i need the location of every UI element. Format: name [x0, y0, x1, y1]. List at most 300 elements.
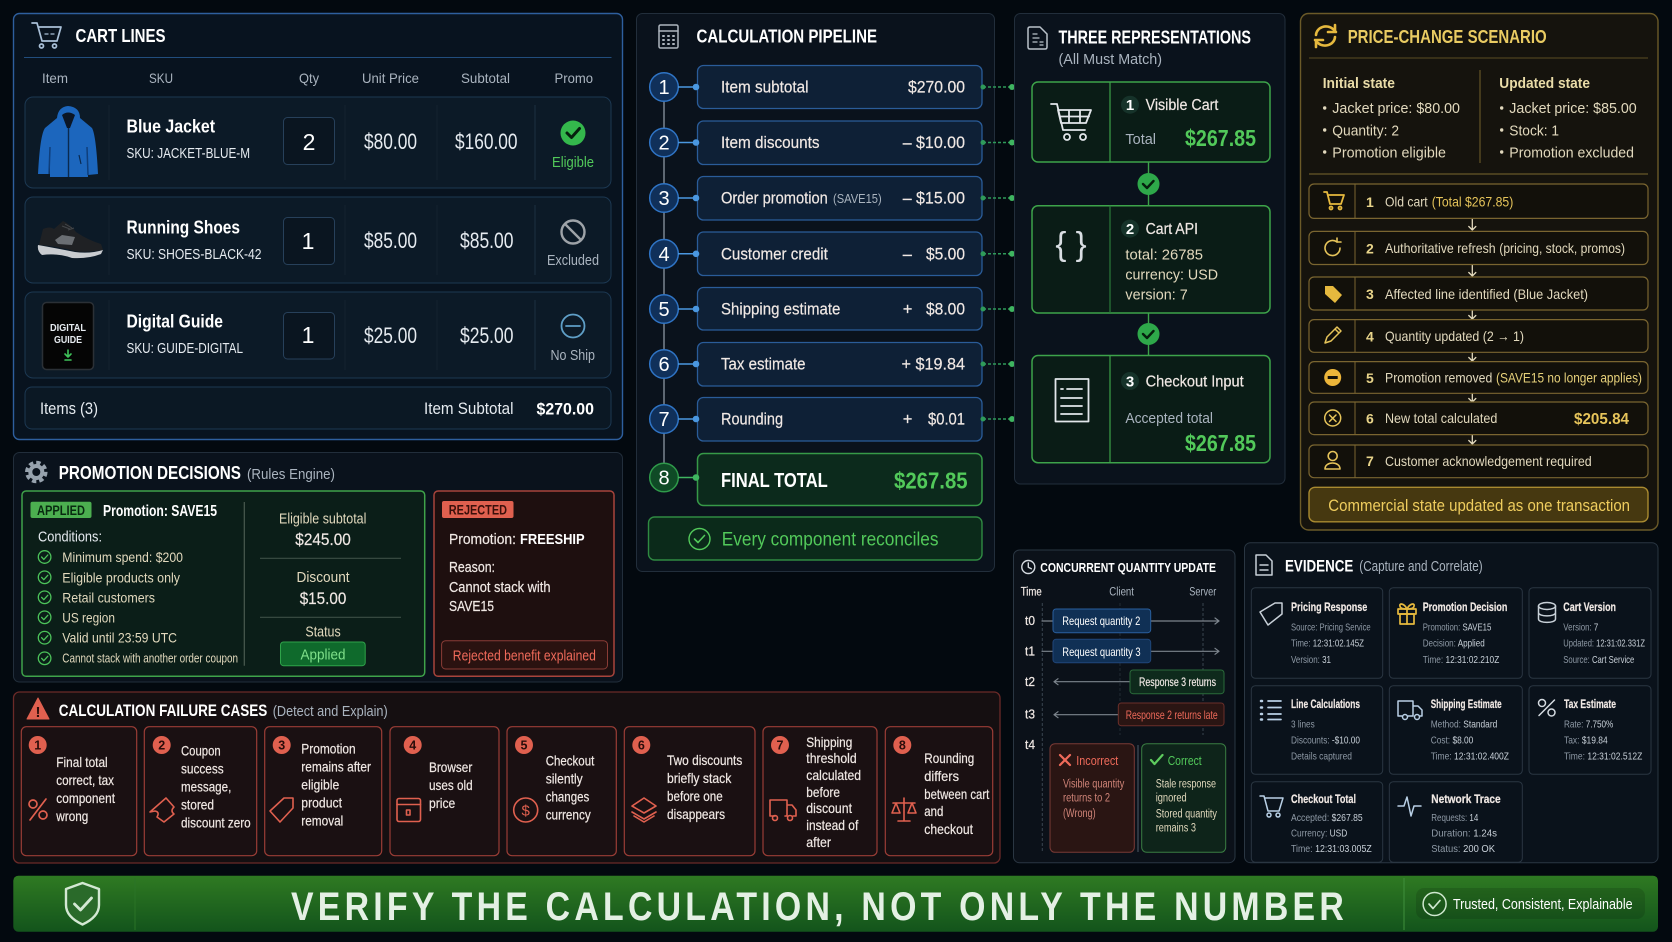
icon: truck: [1398, 701, 1422, 720]
step 6 new total: [1309, 402, 1648, 435]
step 8 final total: 8: [658, 468, 670, 490]
card: visible cart: $267.85: [1185, 125, 1256, 151]
step 1 item subtotal: Item subtotal: [721, 78, 808, 96]
transaction callout: Commercial state updated as one transaction: [1328, 496, 1630, 515]
icon: no shipping: [562, 314, 584, 338]
card: cart api: currency: USD: [1125, 268, 1218, 284]
card: visible cart: Total: [1125, 131, 1156, 148]
step 7 rounding: [650, 398, 1015, 441]
failure case 8: [885, 727, 993, 856]
pipeline spine: [663, 87, 665, 478]
cart row: digital guide: No Ship: [550, 348, 595, 364]
step 5 shipping estimate: $8.00: [926, 300, 965, 318]
message: request quantity 2: Request quantity 2: [1062, 614, 1141, 628]
failure case 3: product: [301, 794, 342, 810]
timeline headers: Time: [1021, 586, 1042, 598]
card: applied promotion: [22, 491, 425, 676]
time labels: t4: [1025, 738, 1035, 752]
evidence: tax estimate: [1529, 686, 1651, 774]
icon: calculator: [659, 25, 678, 48]
evidence: pricing response: Pricing Response: [1291, 600, 1368, 614]
connectors with check icons: [1138, 162, 1160, 356]
step 2 authoritative refresh: 2: [1366, 240, 1374, 256]
icon: gift: [1398, 604, 1416, 624]
panel: three representations: (All Must Match): [1058, 52, 1162, 68]
step 7 customer acknowledgement: [1309, 445, 1648, 478]
icon: minus circle: [1324, 369, 1341, 386]
state comparison: Promotion excluded: [1509, 144, 1634, 162]
flow arrows: [1469, 218, 1476, 444]
evidence: cart version: Updated: 12:31:02.331Z: [1563, 638, 1645, 650]
failure case 1: wrong: [55, 808, 88, 824]
icon: eligible check: [560, 120, 586, 146]
failure case 1: component: [56, 790, 115, 806]
card: cart api: version: 7: [1125, 288, 1188, 304]
conditions checklist: Valid until 23:59 UTC: [62, 630, 177, 646]
card: rejected promotion: Promotion:: [449, 531, 516, 548]
evidence: tax estimate: Tax: $19.84: [1564, 734, 1608, 746]
card: checkout input: Accepted total: [1125, 410, 1213, 427]
step 6 tax estimate: [650, 342, 1015, 386]
reconcile callout: [648, 517, 982, 560]
icon: digital guide tablet: [42, 302, 94, 370]
cart row: blue jacket: Blue Jacket: [126, 116, 215, 136]
icon: digital guide tablet: DIGITAL: [50, 322, 87, 334]
failure case 7: discount: [806, 800, 852, 816]
message: response 2 returns late: [1118, 703, 1224, 726]
state comparison: Stock: 1: [1509, 122, 1559, 140]
icon: browser: [397, 798, 420, 822]
failure case 5: [507, 727, 616, 856]
step 4 quantity updated: 4: [1366, 328, 1374, 344]
card: checkout input: $267.85: [1185, 430, 1256, 456]
cart row: blue jacket: Eligible: [552, 155, 594, 171]
state comparison: Promotion eligible: [1332, 144, 1446, 162]
panel: calculation failure cases: (Detect and Explain): [273, 704, 388, 720]
icon: stacked layers: [632, 798, 656, 822]
outcome: incorrect: [1050, 744, 1134, 852]
card: visible cart: [1032, 82, 1270, 162]
step 8 final total: [650, 454, 982, 506]
cart row: digital guide: Digital Guide: [126, 310, 223, 332]
evidence: line calculations: 3 lines: [1291, 718, 1315, 730]
step 1 old cart: Old cart: [1385, 194, 1428, 210]
outcome: correct: remains 3: [1156, 822, 1196, 834]
evidence: cart version: Source: Cart Service: [1563, 654, 1634, 666]
failure case 4: Browser: [429, 759, 473, 775]
step 2 authoritative refresh: Authoritative refresh: [1385, 240, 1496, 256]
time labels: t0: [1025, 614, 1035, 628]
failure case 2: 2: [158, 738, 165, 752]
icon: calculation circle: [1325, 410, 1341, 426]
cart row: digital guide: [25, 292, 611, 378]
evidence: shipping estimate: Cost: $8.00: [1431, 734, 1473, 746]
evidence: pricing response: Version: 31: [1291, 654, 1331, 666]
trust badge: Trusted, Consistent, Explainable: [1453, 897, 1633, 913]
step 7 rounding: 7: [658, 409, 670, 431]
heading: evidence: EVIDENCE: [1285, 556, 1353, 576]
panel: price-change scenario: [1300, 14, 1658, 530]
icon: representation document: [1028, 27, 1047, 49]
failure case 3: removal: [301, 812, 343, 828]
cart row: running shoes: $85.00: [364, 228, 417, 253]
cart row: running shoes: [25, 197, 611, 283]
failure case 3: [265, 727, 382, 856]
failure case 2: discount zero: [181, 814, 251, 830]
step 6 new total: $205.84: [1574, 411, 1629, 428]
conditions checklist: [38, 549, 238, 666]
evidence: network trace: Duration: 1.24s: [1431, 828, 1497, 840]
evidence: line calculations: Discounts: -$10.00: [1291, 734, 1360, 746]
outcome: incorrect: returns to 2: [1063, 792, 1110, 804]
failure case 6: Two discounts: [667, 752, 742, 768]
icon: warning triangle: !: [36, 704, 40, 721]
evidence: promotion decision: Promotion: SAVE15: [1423, 622, 1491, 634]
step 8 final total: $267.85: [894, 468, 968, 494]
panel: calculation pipeline: [636, 14, 1015, 572]
step 7 rounding: $0.01: [928, 410, 965, 428]
step 4 customer credit: 4: [658, 244, 670, 266]
step 5 promotion removed: Promotion removed: [1385, 370, 1492, 386]
state comparison: [1323, 70, 1637, 163]
icon: evidence document: [1256, 555, 1272, 575]
step 3 affected line: [1309, 277, 1648, 310]
failure case 1: Final total: [56, 754, 108, 770]
state comparison: Updated state: [1499, 75, 1590, 92]
step 5 promotion removed: 5: [1366, 370, 1374, 386]
time labels: t1: [1025, 644, 1035, 658]
outcome: incorrect: Visible quantity: [1063, 778, 1124, 790]
card: rejected promotion: Rejected benefit explained: [453, 648, 596, 664]
cart row: blue jacket: $160.00: [455, 129, 518, 154]
conditions checklist: Minimum spend: $200: [62, 549, 183, 565]
conditions checklist: Eligible products only: [62, 569, 180, 585]
evidence: line calculations: Details captured: [1291, 750, 1352, 762]
step 6 tax estimate: Tax estimate: [721, 356, 806, 374]
card: cart api: Cart API: [1146, 221, 1198, 238]
icon: gear: [27, 462, 46, 482]
icon: list: [1261, 701, 1281, 720]
step 4 quantity updated: Quantity updated (2 → 1): [1385, 328, 1524, 344]
icon: braces: { }: [1055, 225, 1087, 262]
icon: pulse: [1398, 797, 1421, 816]
step 5 shipping estimate: Shipping estimate: [721, 300, 840, 318]
evidence: tax estimate: Time: 12:31:02.512Z: [1564, 750, 1643, 762]
evidence: promotion decision: Decision: Applied: [1423, 638, 1485, 650]
cart row: running shoes: 1: [302, 228, 314, 254]
step 5 shipping estimate: [650, 288, 1015, 330]
failure case 5: silently: [546, 770, 583, 786]
icon: database: [1538, 602, 1556, 622]
table header: Subtotal: [461, 70, 510, 86]
failure case 7: after: [806, 834, 831, 850]
cart row: blue jacket: [25, 97, 611, 188]
cart row: blue jacket: SKU: JACKET-BLUE-M: [126, 146, 250, 162]
card: visible cart: 1: [1126, 97, 1134, 114]
outcome: correct: ignored: [1156, 792, 1187, 804]
icon: cart: [1260, 796, 1283, 817]
message: response 3 returns: Response 3 returns: [1139, 675, 1216, 689]
time labels: [1025, 614, 1035, 752]
step 5 promotion removed: [1309, 362, 1648, 393]
failure case 6: briefly stack: [667, 770, 732, 786]
icon: cart: [32, 23, 61, 48]
step 4 quantity updated: [1309, 320, 1648, 352]
table header: SKU: [149, 70, 173, 86]
failure case 5: currency: [546, 806, 591, 822]
icon: clock: [1022, 560, 1035, 574]
applied summary: Status: [305, 624, 341, 640]
icon: excluded: [562, 220, 584, 244]
cart row: digital guide: 1: [302, 322, 314, 348]
message: request quantity 2: [1053, 609, 1151, 633]
failure case 2: stored: [181, 796, 214, 812]
outcome: correct: Stored quantity: [1156, 808, 1217, 820]
cart row: running shoes: Excluded: [547, 253, 599, 269]
step 6 new total: New total calculated: [1385, 410, 1497, 426]
conditions checklist: Retail customers: [62, 589, 155, 605]
card: cart api: total: 26785: [1125, 248, 1203, 264]
outcome: correct: Stale response: [1156, 778, 1216, 790]
evidence: checkout total: Checkout Total: [1291, 792, 1356, 806]
transaction callout: [1309, 487, 1648, 522]
evidence: cart version: [1529, 588, 1651, 678]
table header: [42, 70, 593, 86]
applied summary: Applied: [300, 646, 346, 664]
icon: truck: [770, 800, 796, 820]
failure case 3: Promotion: [301, 740, 356, 756]
badge: rejected: REJECTED: [449, 502, 507, 518]
cart summary row: $270.00: [536, 400, 594, 418]
banner: verify the calculation: [13, 876, 1658, 932]
heading: promotion decisions: PROMOTION DECISIONS: [59, 463, 241, 483]
message arrows: [1042, 618, 1219, 718]
icon: digital guide tablet: GUIDE: [54, 334, 82, 346]
failure case 7: threshold: [806, 750, 857, 766]
step 6 tax estimate: + $19.84: [902, 356, 965, 374]
step 2 item discounts: Item discounts: [721, 134, 820, 152]
state comparison: Quantity: 2: [1332, 122, 1399, 140]
failure case 7: Shipping: [806, 734, 852, 750]
step 4 customer credit: $5.00: [926, 245, 965, 263]
failure case 8: checkout: [924, 821, 973, 837]
failure case 6: 6: [638, 738, 645, 752]
panel: evidence: (Capture and Correlate): [1359, 559, 1483, 575]
panel: calculation failure cases: [14, 692, 1000, 863]
failure case 6: before one: [667, 788, 723, 804]
applied summary: Eligible subtotal: [279, 512, 366, 528]
time labels: t2: [1025, 675, 1035, 689]
icon: percent: [29, 799, 47, 820]
evidence: checkout total: Currency: USD: [1291, 828, 1348, 840]
timeline axes: [1042, 603, 1203, 852]
step 6 tax estimate: 6: [658, 354, 670, 376]
failure case 5: changes: [546, 788, 589, 804]
state comparison: Jacket price: $85.00: [1509, 100, 1637, 117]
table header: Item: [42, 70, 68, 86]
failure case 2: [144, 727, 257, 856]
icon: running shoe: [38, 221, 103, 258]
step 2 item discounts: – $10.00: [903, 134, 965, 152]
card: rejected promotion: FREESHIP: [520, 531, 585, 548]
step 3 order promotion: 3: [658, 188, 670, 210]
panel: concurrent quantity update: [1014, 550, 1235, 863]
panel: promotion decisions: [14, 452, 622, 682]
failure case 5: 5: [521, 738, 528, 752]
cart summary row: Items (3): [40, 400, 98, 418]
step 5 shipping estimate: 5: [658, 299, 670, 321]
step 3 affected line: Affected line identified (Blue Jacket): [1385, 286, 1588, 302]
icon: refresh: [1315, 25, 1336, 47]
failure case 6: [624, 727, 755, 856]
evidence: network trace: Status: 200 OK: [1431, 843, 1495, 855]
cart row: digital guide: SKU: GUIDE-DIGITAL: [126, 341, 243, 357]
failure case 7: [763, 727, 877, 856]
evidence: promotion decision: Promotion Decision: [1423, 600, 1507, 614]
panel: three representations: [1014, 14, 1285, 484]
card: rejected promotion: Reason:: [449, 560, 495, 576]
evidence: network trace: [1389, 782, 1522, 862]
icon: coupon: [150, 798, 174, 822]
applied summary: $15.00: [300, 589, 346, 608]
failure case 7: before: [806, 784, 840, 800]
step 1 item subtotal: $270.00: [908, 78, 965, 96]
failure case 8: between cart: [924, 786, 989, 802]
failure case 3: remains after: [301, 758, 371, 774]
evidence: pricing response: Source: Pricing Service: [1291, 622, 1371, 634]
icon: balance scale: [892, 798, 916, 821]
step 3 order promotion: Order promotion: [721, 190, 828, 208]
step 4 customer credit: [650, 232, 1015, 276]
evidence: checkout total: Accepted: $267.85: [1291, 812, 1363, 824]
message: response 3 returns: [1130, 670, 1224, 694]
failure case 2: message,: [181, 778, 231, 794]
conditions checklist: Cannot stack with another order coupon: [62, 652, 238, 666]
icon: dollar circle: $: [522, 802, 531, 820]
icon: cart: [1324, 192, 1344, 210]
step 2 authoritative refresh: (pricing, stock, promos): [1499, 240, 1625, 256]
icon: pencil: [1325, 327, 1341, 343]
card: checkout input: [1032, 356, 1270, 463]
reconcile callout: Every component reconciles: [722, 530, 938, 550]
step 1 old cart: 1: [1366, 194, 1374, 210]
failure case 8: and: [924, 803, 943, 819]
icon: warning triangle: [27, 698, 49, 721]
message: request quantity 3: [1053, 639, 1151, 663]
heading: concurrent quantity update: CONCURRENT QUANTITY UPDATE: [1040, 561, 1216, 575]
panel: evidence: [1244, 543, 1658, 863]
failure case 8: 8: [899, 738, 906, 752]
panel: cart lines: [14, 14, 622, 440]
step 5 shipping estimate: +: [903, 300, 912, 318]
cart row: running shoes: $85.00: [460, 228, 514, 253]
card: rejected promotion: Cannot stack with: [449, 580, 550, 596]
applied summary: $245.00: [295, 530, 351, 549]
table header: Qty: [299, 70, 319, 86]
failure case 6: disappears: [667, 806, 725, 822]
heading: calculation pipeline: CALCULATION PIPELINE: [696, 26, 877, 46]
step 2 item discounts: 2: [658, 132, 670, 154]
timeline headers: Client: [1109, 586, 1135, 598]
applied summary: [260, 512, 401, 666]
cart row: blue jacket: $80.00: [364, 129, 417, 154]
icon: cart: [1051, 104, 1091, 140]
failure case 7: 7: [777, 738, 784, 752]
icon: document: [1056, 379, 1088, 422]
trust badge: [1416, 888, 1645, 919]
step 3 affected line: 3: [1366, 286, 1374, 302]
failure case 8: differs: [924, 768, 959, 784]
cart row: digital guide: $25.00: [364, 323, 417, 348]
icon: shield: [66, 883, 99, 924]
heading: calculation failure cases: CALCULATION FAILURE CASES: [59, 702, 267, 720]
evidence: cart version: Version: 7: [1563, 622, 1598, 634]
cart row: digital guide: $25.00: [460, 323, 514, 348]
evidence: shipping estimate: [1389, 686, 1522, 774]
cart row: running shoes: SKU: SHOES-BLACK-42: [126, 247, 262, 263]
evidence: shipping estimate: Shipping Estimate: [1431, 697, 1502, 711]
failure case 7: instead of: [806, 817, 858, 833]
step 1 old cart: [1309, 184, 1648, 218]
failure case 3: 3: [278, 738, 285, 752]
step 3 order promotion: [650, 176, 1015, 220]
step 7 rounding: +: [903, 410, 912, 428]
failure case 4: [390, 727, 499, 856]
step 7 rounding: Rounding: [721, 410, 783, 428]
step 6 new total: 6: [1366, 410, 1374, 426]
banner headline: VERIFY THE CALCULATION, NOT ONLY THE NUMBER: [291, 885, 1348, 929]
heading: three representations: THREE REPRESENTATIONS: [1058, 28, 1251, 48]
evidence: checkout total: Time: 12:31:03.005Z: [1291, 843, 1372, 855]
failure case 1: 1: [34, 738, 41, 752]
failure case 3: eligible: [301, 776, 339, 792]
evidence: promotion decision: Time: 12:31:02.210Z: [1423, 654, 1500, 666]
evidence: network trace: Network Trace: [1431, 792, 1501, 806]
card: applied promotion: Conditions:: [38, 530, 102, 546]
evidence: pricing response: Time: 12:31:02.145Z: [1291, 638, 1364, 650]
failure case 4: 4: [409, 738, 416, 752]
card: cart api: 2: [1126, 221, 1134, 238]
badge: applied: APPLIED: [37, 503, 85, 518]
cart summary row: [25, 387, 611, 429]
evidence: shipping estimate: Time: 12:31:02.400Z: [1431, 750, 1509, 762]
evidence: pricing response: [1251, 588, 1383, 678]
step 1 item subtotal: [650, 66, 1015, 108]
card: rejected promotion: SAVE15: [449, 599, 494, 615]
cart row: blue jacket: 2: [303, 129, 315, 155]
icon: blue jacket: [38, 106, 98, 177]
evidence: line calculations: Line Calculations: [1291, 697, 1360, 711]
evidence: cart version: Cart Version: [1563, 600, 1616, 614]
card: cart api: [1032, 206, 1270, 313]
evidence: tax estimate: Rate: 7.750%: [1564, 718, 1613, 730]
card: applied promotion: Promotion: SAVE15: [103, 503, 217, 520]
step 3 order promotion: – $15.00: [903, 190, 965, 208]
card: visible cart: Visible Cart: [1146, 97, 1219, 114]
failure case 8: Rounding: [924, 750, 974, 766]
time labels: t3: [1025, 708, 1035, 722]
step 4 customer credit: –: [903, 245, 913, 263]
card: rejected promotion: [434, 491, 614, 676]
step 3 order promotion: (SAVE15): [833, 191, 882, 206]
state comparison: Jacket price: $80.00: [1332, 100, 1460, 117]
evidence: tax estimate: Tax Estimate: [1564, 697, 1616, 711]
card: checkout input: 3: [1126, 374, 1134, 390]
step 1 old cart: (Total $267.85): [1432, 194, 1513, 210]
message: response 2 returns late: Response 2 returns late: [1126, 708, 1218, 722]
failure case 4: uses old: [429, 777, 473, 793]
step 7 customer acknowledgement: 7: [1366, 453, 1374, 469]
